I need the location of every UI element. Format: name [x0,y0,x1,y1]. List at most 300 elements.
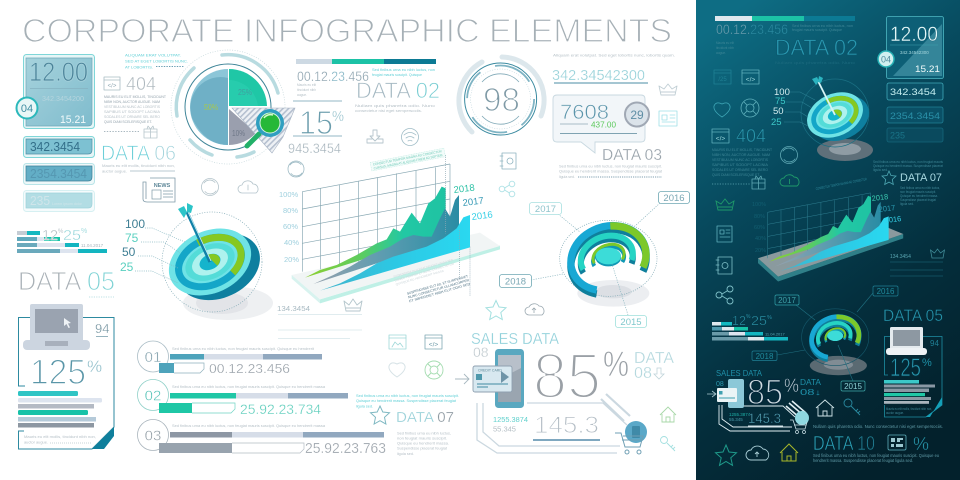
text: data 03 caption: Quisque eu hendrerit massa. Suspendisse placerat feugiat [559,170,662,174]
icon: code window [104,77,120,90]
slice 50 percent: 50% [204,103,218,112]
text: dark mauris: SODALES UT ORNARE SEL BERO [712,168,768,172]
chart header caption: CURSUS, MAGNA AT ALIQUAM FINEM AD SEPTEM [373,153,443,171]
heading: data 10: DATA 10 [813,433,875,455]
panel: dark clock card: 15.21 [915,64,940,75]
number: 134.3454 with lines: 134.3454 [277,304,310,313]
icon: newspaper: NEWS [154,183,171,189]
text: finibus teal: Quisque eu hendrerit massa. Suspendisse placerat feugiat [356,399,456,403]
target labels [120,217,145,274]
chart axis labels: 80% [283,206,298,215]
icon: lifebuoy [425,361,443,379]
chart footer captions: NUNC CONSECTETUR ULLAMCORPER [408,278,470,300]
icon: dark heart [714,103,730,117]
panel: value rows: 2354.3454 [30,167,87,181]
row 03: Sed finibus urna eu nibh luctus, non feugiat mauris suscipit. Quisque eu hendrerit massa [172,424,325,428]
icon: dark refresh [780,146,798,164]
stat: 15 percent [288,101,344,156]
text: dark nullam: Nullam quis pharetra odio. Nunc consectetur nisi eget sempersociis. [813,424,943,429]
bar chart: small stacked bars [17,227,107,253]
target labels: 50 [122,245,136,259]
number: dark 08: 08 [716,381,724,388]
white page background [0,0,696,480]
numbers: sales detail: 1255.3874 [493,417,528,424]
dark target shadow [817,139,873,161]
text block: mauris [104,95,167,132]
icon: address book [500,153,516,169]
chart plate [292,233,500,303]
text: dark notes: tincidunt nibh [716,46,734,50]
icon: laptop [23,304,90,350]
text: aliquam right: Aliquam erat volutpat. Sed eget lobortis nunc, lobortis quam. [553,54,675,58]
frame lines [477,394,630,453]
heading: dark data 05: DATA 05 [883,307,943,325]
icon: dark cloud lower [746,446,769,460]
stat: 15 percent: 945.3454 [288,140,341,156]
icon: dark house lower [780,444,798,461]
target labels: 25 [120,260,134,274]
icon: crown [659,84,677,95]
panel: laptop stat: Mauris eu elit mollis, tincidunt nibh non, [24,435,96,439]
text: data 03 caption: Sed finibus urna eu nibh luctus, non feugiat mauris suscipit. [559,164,662,168]
chart year labels: 2017 [462,195,484,209]
chart footer captions [393,255,471,306]
numbers: sales detail: 55.345 [493,426,516,434]
target labels: 100 [125,217,145,231]
chart header caption: CONSECTUR TEMPOR MAGNA AD CONSECTUR [373,149,443,167]
text: data 07 caption [397,432,451,456]
icon: dark star lower [716,445,736,465]
dark axis labels: 100% [752,202,766,208]
series 2018 [305,187,446,278]
stat: 15 percent: 15 [299,104,333,141]
text: data 07 caption: Sed finibus urna eu nibh luctus, [397,432,451,436]
panel: clock card [16,54,94,128]
icon: refresh small [288,161,304,177]
panel: dark laptop stat: auctor augue. [886,411,904,415]
row 03: 25.92.23.763 [305,440,386,457]
icon: cloud [238,181,258,193]
number: 342.34542300: 342.34542300 [552,67,645,84]
icon: dark gift [752,176,765,189]
row 01: Sed finibus urna eu nibh luctus, non feugiat mauris suscipit. Quisque eu hendrerit [172,347,314,351]
dark label 2016 [873,286,898,296]
label: dark data 08: DATA [800,378,822,387]
numbers: sales detail [493,412,600,440]
icon: shopping cart [615,421,647,454]
panel: value rows: 235 [30,194,50,208]
dark target labels: 100 [774,87,790,98]
dark label 2017 [775,295,799,305]
label: data 08: 08 [634,365,652,382]
dark chart year labels: 2018 [871,192,889,203]
text: top progress notes [297,68,435,97]
dark small stacked bars: % [767,315,772,321]
stat: dark 85 percent: % [784,376,799,397]
panel: dark value rows: 2354.3454 [890,111,940,122]
dark target labels: 50 [773,106,784,117]
arrow in target [178,203,211,262]
row 01 [138,341,322,376]
icon: star [486,300,506,320]
icon: cloud upload [525,304,544,315]
text block: mauris: SAPIBUS UT SODOPT LACINIA [104,110,161,114]
target disc [158,213,271,316]
icon: dark star [882,171,896,184]
ring shadow [577,280,649,307]
panel: dark value rows: 235 [890,130,905,140]
label 2018: 2018 [505,276,526,288]
label: dark data 08 [800,378,822,397]
panel: laptop stat: auctor augue. [24,440,48,444]
number: dark 00.12.23.456: 00.12.23.456 [716,21,788,37]
panel: laptop stat: 94 [95,321,109,336]
text: nullam: consectetur nisi eget sempersociis. [355,109,422,113]
text: dark mauris: MAURIS EU ELIT MOLLIS, TINCIDUNT [712,148,773,152]
text: dark finibus: ligula sed. [873,168,888,172]
dark ring inner [826,328,845,342]
stat: 85 percent: 85 [533,340,601,412]
bar: top progress [296,59,436,64]
text block: aliquam: SED AT EGET LOBORTIS NUNC. [125,60,188,64]
icon: code window small [425,335,442,349]
heading: dark sales data: SALES DATA [716,369,763,378]
stat: 85 percent: % [603,345,629,384]
ring outer [571,226,646,294]
text: top progress notes: Mauris eu elit [297,83,316,87]
text: data 07 caption: non feugiat mauris suscipit. [397,436,447,440]
text: top progress notes: tincidunt nibh [297,88,316,92]
chart: donut pie [171,50,295,164]
series 2017 [313,195,459,284]
icon: download [367,130,383,143]
dark axis labels: 80% [754,214,765,220]
text: dark finibus lower: Sed finibus urna eu nibh luctus, non feugiat mauris suscipit. Quisque eu [813,453,940,458]
dark grid [768,193,871,258]
pie outer arcs [176,55,278,157]
dark target labels: 25 [771,117,782,128]
chart axis labels: 40% [284,238,299,247]
label 2015 [616,316,646,328]
icon: dark share [716,286,733,304]
dark frame lines [719,401,806,431]
series 2016 [320,215,470,291]
text: data 07 caption: Quisque eu hendrerit massa. [397,442,449,446]
icon: refresh [202,178,218,196]
bar: dark top progress [715,16,855,21]
label 2017: 2017 [535,204,556,215]
callout: 7608 bubble [553,95,649,153]
panel: dark clock card: 12.00 [890,23,938,46]
arrow: dark to card [707,391,716,397]
dark 134.3454 with lines: 134.3454 [890,254,911,260]
dark series 2016 [780,216,889,271]
dark small stacked bars: % [746,314,751,320]
text block: aliquam: AT LOBORTIS. [125,66,153,70]
icon: house [660,407,676,422]
icon: dark code 404: </> [716,136,725,142]
text: dark data 07 caption: Sed finibus urna eu nibh luctus, [900,186,940,190]
chart axis labels: 20% [284,255,299,264]
text: data 07 caption: ligula sed. [397,452,414,456]
text: data 03 caption: ligula sed. [559,175,575,179]
ring inner [593,244,624,266]
text: dark finibus [873,160,943,172]
icon: key [660,436,675,451]
row 01: 01 [145,349,161,366]
text: dark finibus lower: hendrerit massa. Suspendisse placerat feugiat ligula sed. [813,458,913,463]
dark ring dotted [802,309,869,366]
label: dark data 08: 08↓ [800,388,821,397]
dark ring outer [812,317,859,360]
ring leaders [531,203,660,315]
icon: qr code [888,435,906,450]
panel: dark laptop stat: 94 [930,339,939,348]
dark series 2018 [769,196,871,262]
icon: dark crown [716,199,734,210]
text block: mauris: VESTIBULUM NUNC AC LOBORTIS [104,105,161,109]
text: dark notes: feugiat mauris suscipit. Quisque [792,28,842,32]
label 2017 [530,202,562,215]
panel: clock card: 342.3454200 [42,96,84,103]
text: dark data 07 caption: Suspendisse placerat feugiat [900,198,936,202]
number: 134.3454 with lines [277,304,362,338]
label 2015: 2015 [620,317,642,328]
target shadow [183,286,273,320]
dark label 2018 [752,351,777,361]
row 02: Sed finibus urna eu nibh luctus, non feugiat mauris suscipit. Quisque eu hendrerit massa [172,385,325,389]
gauge: 98 [459,57,544,135]
dark chart year labels: 2017 [878,203,896,214]
text: dark mauris: QUIS DIAM SCELERISQUE ET. [712,173,760,177]
text: data 06 caption [102,164,175,174]
callout: 7608 bubble: 7608 [560,101,609,124]
row 02: 02 [145,388,161,404]
text: data 06 caption: Mauris eu elit mollis, tincidunt nibh non, [102,164,175,168]
ring labels [500,192,690,328]
label: dark percent: % [913,434,929,454]
text: dark finibus: Sed finibus urna eu nibh luctus, non feugiat mauris [873,160,943,164]
icon: dark phone and card [717,379,744,408]
dark axis labels: 20% [755,248,766,254]
label 2018 [500,274,532,288]
slice 10 percent: 10% [232,129,245,138]
bar chart: small stacked bars: 12 [42,227,58,244]
dark axis labels: 60% [754,225,765,231]
chart dotted guides [446,155,470,297]
chart axis labels: 60% [283,222,298,231]
text: dark data 07 caption: Quisque eu hendrerit massa. [900,194,938,198]
slice 25 percent: 25% [238,88,252,97]
chart footer captions: ET IMPERDIET NIBH ELIT ODIO SED [409,282,471,303]
row 02 [138,380,348,417]
gauge: 98: 98 [483,81,520,118]
panel: laptop stat [18,297,114,449]
dark arrow [812,76,835,115]
chart year labels [453,182,493,223]
text: dark mauris [712,148,773,184]
numbers: dark sales detail: 55.345 [729,417,743,422]
text: dark finibus: Quisque eu hendrerit massa. Suspendisse placerat [873,164,943,168]
icon: crown lower [344,299,362,311]
text block: aliquam: ALIQUAM ERAT VOLUTPAT. [125,54,181,58]
label 2016 [658,192,690,204]
row 03 [138,420,386,457]
icon: newspaper [143,178,175,202]
heading: data 02: DATA 02 [356,78,440,103]
chart footer captions: DONEC TEMPOR ET NUNC CONSECTETUR [394,262,455,283]
dark label 2015: 2015 [844,382,862,391]
text: dark notes: Nullam quis pharetra odio. Nunc [775,61,855,65]
text: dark mauris: VESTIBULUM NUNC AC LOBORTIS [712,158,769,162]
text: dark mauris: SAPIBUS UT SODOPT LACINIA [712,163,769,167]
chart: dark isometric area chart [758,193,903,281]
panel: laptop stat: % [87,357,102,376]
dark panel background [696,0,960,480]
dark chart year labels [871,192,902,225]
heading: sales data: SALES DATA [471,331,560,348]
text: dark notes: augue. [716,51,726,55]
icon: dark address book [716,257,732,274]
chart: target [158,203,273,320]
chart: dark target [800,76,876,161]
title: CORPORATE INFOGRAPHIC ELEMENTS [22,12,672,49]
heading: dark data 07: DATA 07 [900,172,942,184]
arrow: to card [455,374,469,384]
text block: mauris: NIBH NON, AUCTOR AUGUE. NAM [104,100,160,104]
dark chart year labels: 2016 [884,214,902,225]
bar chart: small stacked bars: % [81,228,87,235]
panel: dark clock card: 342.34542300 [900,50,929,55]
bar chart: small stacked bars: % [58,229,64,235]
bar chart: small stacked bars: 11.04.2017 [81,243,104,248]
dark target labels [771,87,790,128]
icon: image window [389,335,406,349]
panel: value rows: Lorem ipsum dolor [52,202,83,206]
ring center [596,248,621,266]
text block: mauris: MAURIS EU ELIT MOLLIS, TINCIDUNT [104,95,167,99]
chart footer captions: QUISQUE EU HENDRERIT MASSA [395,269,444,286]
number: 00.12.23.456: 00.12.23.456 [297,68,369,84]
dark series 2017 [775,202,881,266]
badge 29: 29 [630,108,644,122]
panel: dark value rows [887,83,943,142]
label: data 08 [634,350,675,382]
text: dark finibus lower [813,453,940,463]
dark axis labels: 40% [755,236,766,242]
numbers: dark sales detail: 145.3 [748,410,781,426]
dark ring labels [752,286,898,391]
text: top progress notes: Sed finibus urna eu nibh luctus, non [372,68,435,72]
chart: ring chart [560,220,657,307]
icon: document [659,111,677,126]
dark 134.3454 with lines [890,254,943,276]
text: finibus teal: Sed finibus urna eu nibh luctus, non feugiat mauris suscipit. [356,394,459,398]
text: dark notes: Sed finibus urna eu nibh luctus, non [792,24,853,28]
dark chart header: CONSECTUR TEMPOR MAGNA AD CONSECTUR [815,177,868,191]
numbers: dark sales detail: 1255.3874 [729,412,751,417]
404 label: 404 [126,74,156,94]
panel: dark clock card [878,16,944,78]
dark small stacked bars: 12 [732,313,746,328]
stat: dark 85 percent: 85 [747,373,783,412]
icon: dark lifebuoy [741,99,759,117]
dark target labels: 75 [775,96,786,107]
dark small stacked bars [712,313,788,340]
text block: mauris: SODALES UT ORNARE SEL BERO [104,115,160,119]
text: top progress notes: feugiat mauris suscipit. Quisque [372,73,422,77]
panel: laptop stat: 125 [30,353,86,392]
icon: dark crown lower [930,249,944,258]
text: dark data 07 caption: non feugiat mauris suscipit. [900,190,936,194]
icon: dark key [844,399,860,415]
icon: dark document [717,226,732,242]
icon: star data 07 [370,406,390,424]
panel: dark laptop stat: Mauris eu elit mollis, tincidunt nibh non, [886,407,932,411]
numbers: dark sales detail [729,410,783,426]
heading: data 06: DATA 06 [101,142,176,165]
icon: wifi [402,128,418,146]
chart: dark ring [802,309,869,375]
icon: share [499,181,515,197]
ring middle [581,236,633,273]
text: top progress notes: augue. [297,93,307,97]
target leader lines [135,228,185,283]
numbers: sales detail: 145.3 [534,412,599,439]
icon: code window small: </> [429,342,438,348]
label: data 08: DATA [634,350,675,367]
chart footer captions: SUSPENDISSE ELIT AD, ET IS IMPERDIET [406,274,468,296]
dark target ring [801,79,869,147]
text block: aliquam [125,54,188,70]
icon: dark house [816,400,834,416]
dark ring center [827,330,843,341]
icon: dark laptop [886,327,927,355]
chart year labels: 2016 [471,209,493,223]
panel: dark laptop stat: 125 [890,354,921,382]
panel: dark value rows: 342.3454 [890,87,936,98]
text: nullam [355,104,435,113]
text: finibus teal: ligula sed. [356,404,373,408]
badge 04: 04 [21,103,33,115]
panel: clock card: 12.00 [29,57,88,87]
icon: dark window: /25 [718,77,727,83]
icon: dark cloud [780,175,799,186]
dark ring leaders [777,293,873,381]
target dotted ring [162,212,262,312]
text: data 03 caption [559,164,662,179]
panel: value rows [24,136,94,212]
panel: value rows: 342.3454 [30,140,80,154]
text: dark mauris: NIBH NON, AUCTOR AUGUE. NAM [712,153,770,157]
dark ring middle [818,323,851,346]
chart year labels: 2018 [453,182,475,196]
chart footer captions: SUSPENDISSE PLACERAT FEUGIAT LIGULA SED [393,258,454,279]
text: nullam: Nullam quis pharetra odio. Nunc [355,104,435,108]
heading: data 05: DATA 05 [18,266,115,296]
stat: 15 percent: % [332,108,344,125]
text: data 06 caption: auctor augue. [102,170,127,174]
chart axis labels [279,190,299,264]
dark plate [758,222,903,281]
dark label 2016: 2016 [877,287,895,296]
dark label 2018: 2018 [756,352,774,361]
text: dark notes: Mauris eu elit [716,41,734,45]
text block: mauris: QUIS DIAM SCELERISQUE ET. [104,120,152,124]
heading: data 07: DATA 07 [396,409,454,426]
icon: gift [144,126,157,138]
row 02: 25.92.23.734 [240,401,321,417]
